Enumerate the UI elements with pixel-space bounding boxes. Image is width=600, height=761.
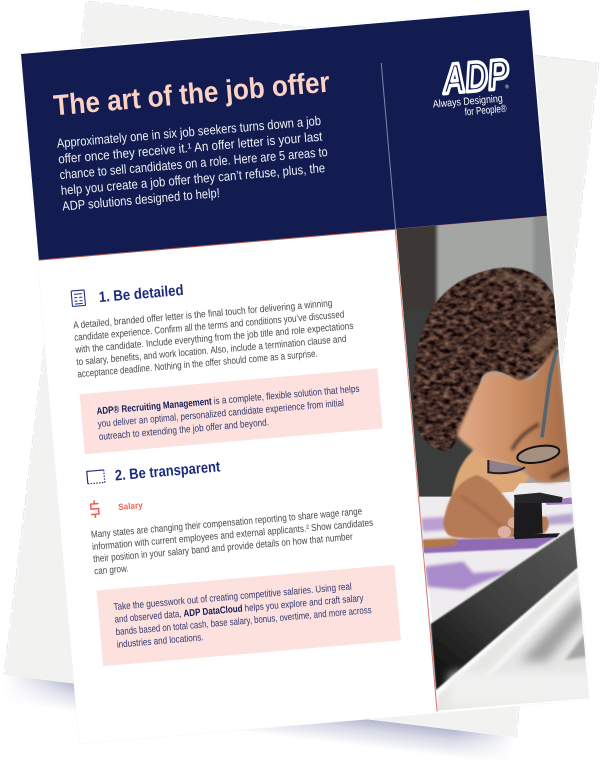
callout: ADP Recruiting Management: ADP® Recruiting Management [96,396,213,417]
face [457,344,571,483]
icon: dashed screen frame [87,470,105,484]
callout: ADP DataCloud: industries and locations. [116,632,204,651]
intro paragraph: offer once they receive it.¹ An offer letter is your last [58,129,323,166]
photo: man inspecting a print with a loupe [390,213,597,717]
intro paragraph: Approximately one in six job seekers turns down a job [56,113,321,151]
body text: be detailed: A detailed, branded offer letter is the final touch for delivering a winning [73,298,333,331]
body text: salary: can grow. [94,563,129,577]
callout: ADP Recruiting Management: is a complete, flexible solution that helps [213,384,360,407]
intro paragraph: ADP solutions designed to help! [62,185,220,214]
shoulder [452,447,530,497]
body text: be detailed: candidate experience. Confirm all the terms and conditions you’ve discussed [74,309,345,344]
callout: ADP Recruiting Management: you deliver an optimal, personalized candidate experience from initial [97,398,344,430]
hand [443,475,549,539]
table with purple print [419,482,575,622]
loupe [513,493,563,539]
subheading: Salary: Salary [118,500,143,512]
icon: checklist document [71,290,85,306]
body text: salary: information with current employees and external applicants.² Show candidates [92,518,374,553]
callout: ADP DataCloud [97,565,401,666]
ADP logo: ® [505,83,509,90]
callout: ADP DataCloud: bands based on total cash, base salary, bonus, overtime, and more across [115,605,372,638]
intro paragraph [56,113,331,214]
body text: be detailed: acceptance deadline. Nothing in the offer should come as a surprise. [77,349,318,380]
logo tagline: Always Designing [432,93,503,111]
eyebrow and stubble [512,424,568,477]
header band [21,10,547,260]
intro paragraph: chance to sell candidates on a role. Here are 5 areas to [59,144,328,182]
body text: salary: Many states are changing their compensation reporting to share wage range [91,506,363,541]
callout: ADP Recruiting Management [80,368,383,454]
hair [413,268,558,451]
callout: ADP Recruiting Management: outreach to extending the job offer and beyond. [98,417,269,443]
back sheet shadow [13,676,508,754]
photo backdrop [396,216,573,514]
body text: salary [91,505,376,577]
callout: ADP DataCloud: Take the guesswork out of creating competitive salaries. Using real [113,581,352,613]
body text: be detailed: with the candidate. Include everything from the job title and role expectations [74,321,354,356]
header vertical divider [381,63,396,229]
foreground machine [433,570,593,717]
body text: salary: their position in your salary band and provide details on how that number [93,532,354,565]
body text: be detailed [72,296,356,380]
callout: ADP DataCloud: helps you explore and craft salary [244,593,364,614]
heading: 2. Be transparent: 2. Be transparent [114,458,221,484]
logo tagline [432,92,507,121]
callout: ADP DataCloud: ADP DataCloud [183,604,243,620]
title: The art of the job offer [52,67,331,122]
photo red edge [395,229,438,712]
intro paragraph: help you create a job offer they can’t refuse, plus, the [60,160,326,198]
body text: be detailed: to salary, benefits, and work location. Also, include a termination clause and [76,334,347,368]
icon: salary dollar sign [90,500,100,518]
black roller bar [431,527,578,690]
ADP logo: ADP [440,50,511,103]
header accent line [39,216,547,261]
glasses [488,349,561,473]
logo tagline: for People® [464,103,507,118]
heading: 1. Be detailed: 1. Be detailed [98,282,184,306]
callout: ADP DataCloud: and observed data, [114,609,182,626]
